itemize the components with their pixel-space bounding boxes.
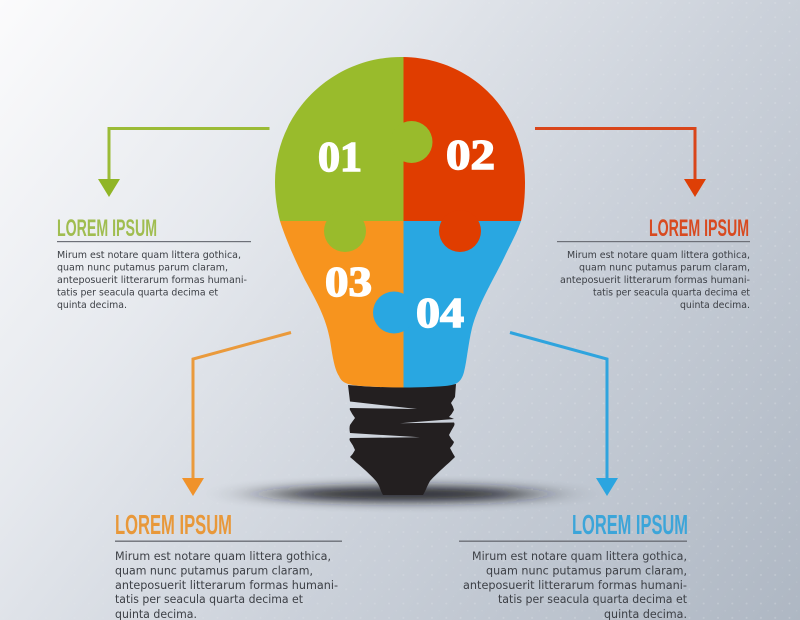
rule bbox=[459, 540, 687, 542]
panel: top right bbox=[557, 215, 750, 311]
body text: tatis per seacula quarta decima et bbox=[593, 288, 750, 298]
arrow: red bbox=[535, 128, 706, 197]
body text: anteposuerit litterarum formas humani- bbox=[115, 579, 338, 592]
rule bbox=[115, 540, 342, 542]
piece 03: orange bbox=[270, 221, 404, 391]
heading: LOREM IPSUM bbox=[115, 509, 232, 540]
puzzle pieces bbox=[270, 50, 530, 391]
body text: quam nunc putamus parum claram, bbox=[486, 564, 687, 578]
number 02: 02 bbox=[446, 133, 495, 179]
body text: anteposuerit litterarum formas humani- bbox=[463, 579, 687, 592]
number 03: 03 bbox=[325, 260, 372, 306]
body text: anteposuerit litterarum formas humani- bbox=[560, 275, 750, 286]
body text: tatis per seacula quarta decima et bbox=[498, 593, 688, 606]
arrow: blue bbox=[510, 332, 618, 496]
body text: Mirum est notare quam littera gothica, bbox=[472, 550, 687, 563]
body text bbox=[115, 550, 338, 620]
body text: Mirum est notare quam littera gothica, bbox=[115, 550, 331, 563]
body text bbox=[560, 250, 750, 311]
body text: anteposuerit litterarum formas humani- bbox=[57, 275, 247, 286]
body text: quam nunc putamus parum claram, bbox=[115, 564, 313, 578]
piece 01: green bbox=[270, 50, 432, 252]
bulb base bbox=[348, 384, 456, 495]
body text: quinta decima. bbox=[680, 300, 750, 311]
number 04: 04 bbox=[416, 291, 464, 337]
panel: top left bbox=[57, 215, 251, 311]
arrow: green bbox=[98, 128, 270, 197]
piece 04: blue bbox=[373, 221, 528, 391]
body text: quam nunc putamus parum claram, bbox=[57, 262, 228, 274]
body text: tatis per seacula quarta decima et bbox=[57, 288, 218, 298]
arrow: orange bbox=[182, 332, 291, 496]
rule bbox=[57, 241, 251, 242]
panel: bottom left bbox=[115, 509, 342, 620]
rule bbox=[557, 241, 750, 242]
body text: Mirum est notare quam littera gothica, bbox=[57, 250, 241, 261]
lightbulb bbox=[270, 50, 530, 495]
body text: Mirum est notare quam littera gothica, bbox=[567, 250, 750, 261]
body text: tatis per seacula quarta decima et bbox=[115, 593, 304, 606]
body text bbox=[463, 550, 688, 620]
bulb ground shadow bbox=[268, 486, 538, 502]
heading: LOREM IPSUM bbox=[57, 215, 157, 242]
panel: bottom right bbox=[459, 509, 688, 620]
body text bbox=[57, 250, 247, 311]
number 01: 01 bbox=[318, 135, 362, 181]
piece 02: red bbox=[404, 50, 530, 252]
body text: quinta decima. bbox=[57, 300, 127, 311]
body text: quam nunc putamus parum claram, bbox=[579, 262, 750, 274]
heading: LOREM IPSUM bbox=[572, 509, 688, 540]
